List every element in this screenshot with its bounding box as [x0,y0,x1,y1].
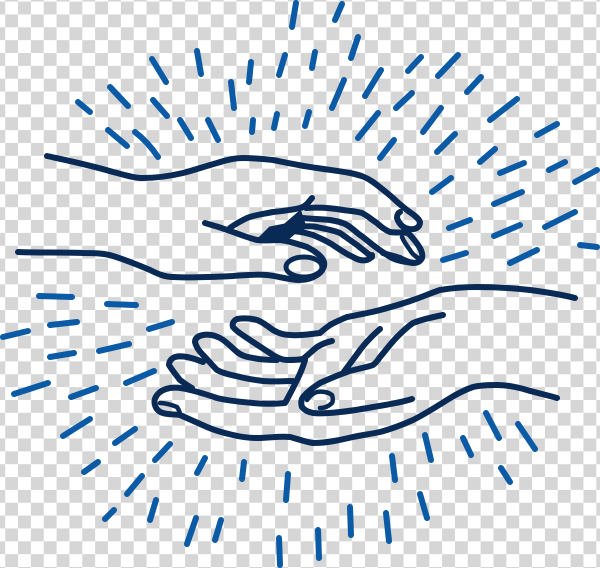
top hand [18,156,422,280]
bottom hand [154,287,575,443]
